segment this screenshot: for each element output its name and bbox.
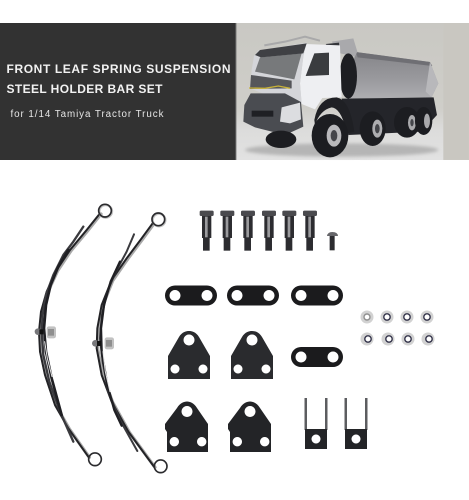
title: STEEL HOLDER BAR SET [6,82,163,96]
windshield [255,53,302,79]
long bolts [200,211,317,251]
link plates [165,286,343,367]
leaf spring 2 [92,213,167,473]
title: FRONT LEAF SPRING SUSPENSION [6,62,230,76]
wheel arch [314,97,354,133]
lock nuts [360,310,434,346]
grille [250,75,292,89]
subtitle: for 1/14 Tamiya Tractor Truck [10,109,164,120]
short screw [327,232,338,250]
photo: dump truck [235,23,469,160]
wheels [266,107,432,157]
bumper [243,93,303,135]
centre bolt and nut [35,326,56,338]
cab [300,44,342,109]
centre bolt and nut [92,337,114,349]
leaf spring 1 [35,204,112,466]
panel: dark title banner [0,23,236,160]
dump body [348,52,438,99]
chassis [342,97,437,135]
title [6,62,230,96]
spare wheel behind cab [340,53,357,99]
roof lights [264,37,320,45]
bent brackets [165,402,271,452]
U holders [304,398,368,449]
side window [306,53,329,76]
flat brackets [168,331,273,379]
